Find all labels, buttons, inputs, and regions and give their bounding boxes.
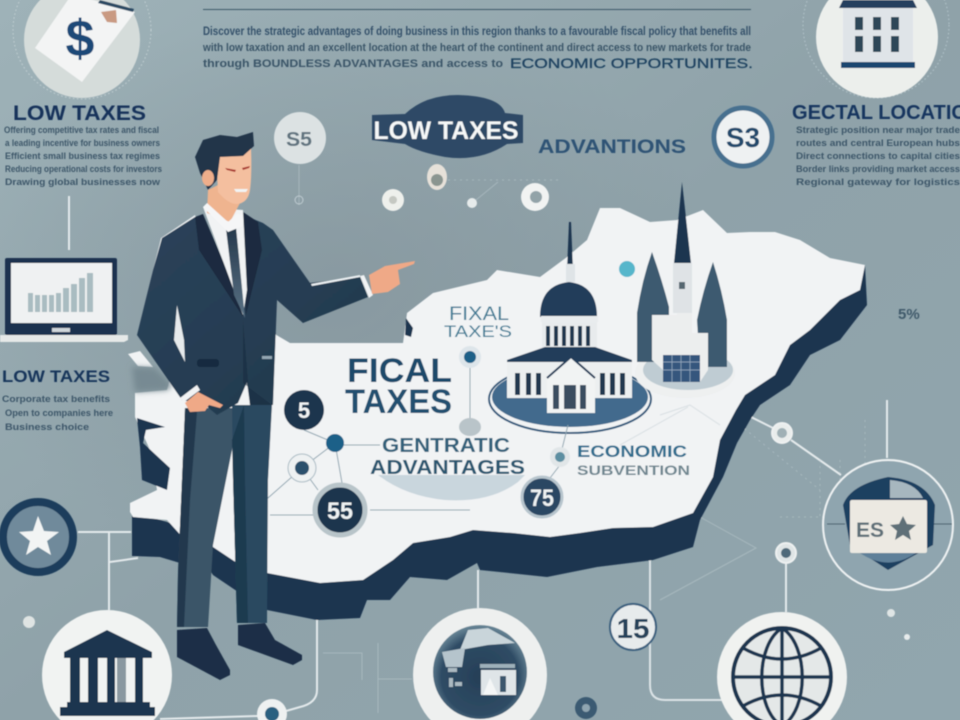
map left dark notch	[137, 418, 170, 490]
rating circle with card and star	[823, 460, 953, 590]
heading: low taxes lower left: LOW TAXES	[2, 368, 110, 386]
percent label: 5%	[898, 306, 920, 323]
intro paragraph: ECONOMIC OPPORTUNITES.	[510, 55, 753, 71]
intro paragraph: with low taxation and an excellent location at the heart of the continent and direct access to new markets for trade	[202, 42, 751, 54]
cathedral	[635, 182, 735, 398]
map label: fiscal taxes small: FIXAL	[449, 304, 509, 325]
map label: fiscal taxes main	[345, 352, 452, 421]
text block: lower left description: Business choice	[5, 422, 89, 433]
heading: advantages: ADVANTIONS	[538, 137, 686, 158]
laptop bar chart	[28, 273, 93, 312]
bottom node	[257, 699, 287, 720]
text block: right description: Direct connections to capital cities	[796, 151, 960, 162]
badge: number right	[714, 108, 772, 166]
callout: low taxes dark blob: LOW TAXES	[374, 117, 518, 145]
text block: left description: Drawing global businesses now	[5, 177, 161, 188]
businessman presenter	[137, 132, 415, 680]
map network nodes: 5	[298, 398, 310, 423]
number badge 15	[610, 604, 656, 650]
image circle: city in globe	[413, 608, 547, 720]
text block: left description: Efficient small business tax regimes	[5, 151, 160, 162]
map white top face	[130, 208, 865, 583]
tax document: $	[66, 10, 95, 68]
intro paragraph: through BOUNDLESS ADVANTAGES and access to	[203, 58, 503, 70]
map label: fiscal taxes main: FICAL	[347, 352, 452, 390]
map label: fiscal taxes small: TAXE'S	[444, 322, 512, 341]
bank circle icon	[42, 610, 172, 720]
badge: number top centre	[274, 112, 326, 164]
map network nodes: 75	[530, 485, 554, 512]
map of region with dark relief	[128, 208, 867, 620]
top left tax document icon	[13, 0, 151, 99]
man jacket and pointing arm	[137, 207, 373, 415]
text block: left description	[4, 125, 162, 188]
text block: left description: Reducing operational costs for investors	[5, 164, 162, 175]
map label: economic	[577, 443, 690, 478]
badge: number right: S3	[726, 122, 760, 153]
map upper-left fragment	[128, 351, 153, 367]
laptop icon	[0, 258, 128, 342]
text block: left description: a leading incentive for business owners	[5, 138, 160, 149]
heading: low taxes left: LOW TAXES	[13, 102, 146, 125]
map shadow fragment	[132, 367, 172, 392]
badge: number top centre: S5	[286, 129, 312, 151]
text block: left description: Offering competitive tax rates and fiscal	[4, 125, 159, 136]
map label: fiscal taxes main: TAXES	[345, 383, 452, 421]
star badge	[3, 502, 73, 572]
text block: lower left description: Corporate tax benefits	[2, 394, 110, 405]
text block: right description: routes and central European hubs	[796, 138, 960, 149]
globe circle icon	[717, 612, 847, 720]
text block: lower left description: Open to companies here	[5, 408, 113, 419]
intro paragraph	[202, 10, 753, 71]
map network nodes	[260, 346, 570, 535]
man head	[195, 132, 254, 232]
map dark relief side	[132, 265, 867, 620]
map label: advantages: ADVANTAGES	[370, 457, 525, 479]
small nodes right	[23, 423, 910, 719]
rating circle with card and star: ES	[856, 519, 884, 542]
man legs and shoes	[177, 405, 302, 680]
man pointing hand	[369, 261, 415, 294]
map label: advantages	[370, 435, 525, 500]
map label: economic: SUBVENTION	[577, 462, 690, 478]
map label: economic: ECONOMIC	[577, 443, 687, 461]
floating nodes	[295, 164, 549, 211]
map label: advantages: GENTRATIC	[382, 435, 510, 457]
text block: lower left description	[2, 394, 113, 433]
callout: low taxes dark blob	[372, 95, 523, 158]
intro paragraph: Discover the strategic advantages of doing business in this region thanks to a favourable fiscal policy that benefits all	[203, 26, 751, 38]
man hand on hip	[185, 392, 223, 412]
text block: right description: Regional gateway for logistics	[796, 177, 960, 188]
map network nodes: 55	[327, 498, 353, 525]
map label: fiscal taxes small	[444, 304, 512, 341]
text block: right description	[796, 125, 960, 188]
government building platform	[489, 182, 735, 433]
building icon top right	[803, 0, 949, 98]
text block: right description: Strategic position near major trade	[796, 125, 960, 136]
number badge 15: 15	[616, 613, 650, 644]
connector lines	[69, 165, 940, 719]
capitol building	[507, 222, 632, 413]
gap between arm and jacket	[174, 305, 185, 362]
